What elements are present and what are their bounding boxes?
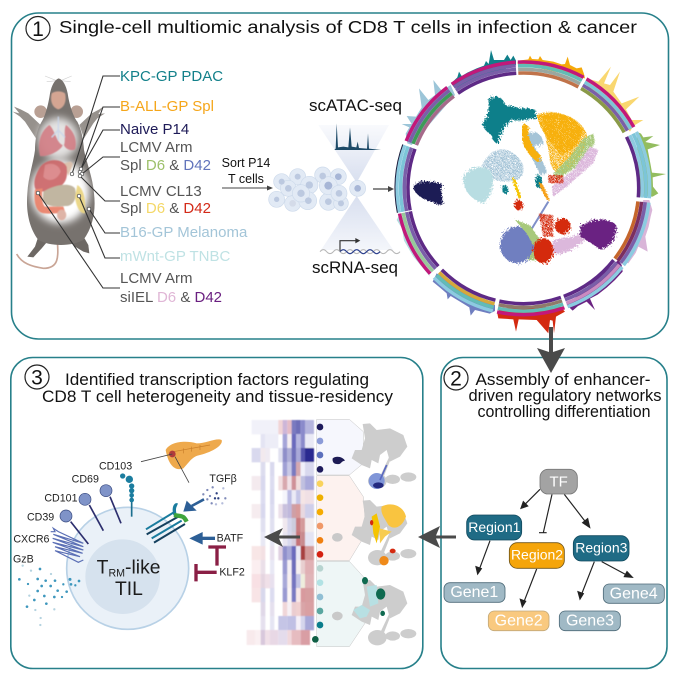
node: Region3 [573,536,629,561]
surface labels: CD101 [44,492,78,504]
sort label with arrow [222,156,273,190]
heading: controlling differentiation [478,403,650,421]
heading: Assembly of enhancer- [476,371,650,389]
node: Region3: Region3 [575,539,628,555]
sample labels: siIEL D6 & D42 [120,289,222,306]
pancreas icon [141,439,222,483]
circular UMAP plot [345,10,680,367]
inhibition bars: KLF2 [196,547,226,581]
node: Gene2 [488,611,549,631]
UMAP clusters [414,96,616,263]
surface labels: TGFβ [209,473,237,485]
step number 2 [444,366,468,390]
step number 2: 2 [450,368,462,390]
scRNA-seq label: scRNA-seq [312,258,398,277]
heading: Identified transcription factors regulating [65,371,369,389]
cell label: RM [108,568,125,580]
leader lines [36,76,120,288]
arrow: panel 1 to panel 2 [537,327,565,373]
sample labels: Naive P14 [120,121,189,138]
arrow: panel 2 to panel 3 [418,526,456,548]
scATAC-seq label: scATAC-seq [309,96,402,115]
step number 3 [25,365,49,390]
sort label with arrow: Sort P14 [222,156,270,170]
panel 3: identified transcription factors [11,358,423,668]
surface proteins [71,487,132,544]
surface labels: KLF2 [219,566,245,578]
node: Gene1 [444,583,505,602]
sample labels: LCMV Arm [120,139,193,156]
network arrows [476,489,632,607]
surface labels: CD39 [27,512,54,524]
node: TF: TF [550,474,568,491]
cluster dots [312,424,323,643]
CXCR6 receptor [51,528,83,562]
small UMAP: effector and exhausted [332,500,416,565]
cluster module panels [312,419,416,647]
cell label: -like [125,557,161,578]
icon: mouse anatomy [13,76,105,268]
surface labels: CD69 [72,473,99,485]
sample labels: Spl D6 & D42 [120,157,211,174]
surface labels: CD103 [99,460,132,472]
arrow: networks to heatmap side [264,528,300,547]
surface labels: CXCR6 [13,533,50,545]
heading [42,371,394,406]
regulatory network diagram [444,469,664,631]
cell label [97,557,161,600]
TGFb receptor [146,505,187,543]
sample labels: LCMV Arm [120,270,193,287]
sample labels: LCMV CL13 [120,183,202,200]
scATAC peaks [334,123,381,150]
sample labels: B-ALL-GP Spl [120,98,214,115]
arrow to UMAP [373,186,394,192]
surface labels [13,460,245,578]
node: TF [540,469,577,494]
node: Gene1: Gene1 [450,584,498,601]
T cell diagram [13,439,245,629]
node: Gene4: Gene4 [610,585,658,602]
sequencing funnel and cells [269,123,400,254]
panel 2: enhancer-driven regulatory networks [441,358,667,668]
sample labels: Spl D6 & D42 [120,200,211,217]
sort label with arrow: T cells [228,172,264,186]
node: Gene3 [559,611,620,631]
cell body [67,507,189,629]
step number 3: 3 [31,366,43,390]
coloured ring segments [345,10,680,367]
arrow: BATF [189,532,215,545]
sample labels: B16-GP Melanoma [120,224,248,241]
T cells cluster [269,167,366,211]
heatmap [247,420,314,645]
surface labels: GzB [13,554,34,566]
peak tracks around ring [397,50,666,333]
small UMAP: naive and memory [333,423,416,489]
cell label: T [97,557,108,578]
heading: CD8 T cell heterogeneity and tissue-residency [42,388,394,406]
node: Region2: Region2 [511,547,563,563]
scRNA transcript [320,238,400,254]
surface labels: BATF [217,533,244,545]
node: Region1 [467,515,522,540]
arrow: TGFb to receptor [183,499,204,512]
step number 1 [26,16,50,41]
panel 1: single-cell multiomic analysis [12,10,680,367]
heading: driven regulatory networks [468,387,662,405]
node: Gene3: Gene3 [566,612,614,629]
title: Single-cell multiomic analysis of CD8 T cells in infection & cancer [59,17,637,37]
sample labels: KPC-GP PDAC [120,68,223,85]
sample labels [120,68,248,306]
small UMAP: tumour infiltrating [332,577,416,645]
cell label: TIL [115,579,143,600]
node: Gene2: Gene2 [495,612,543,629]
step number 1: 1 [32,18,44,41]
heading [468,371,662,421]
node: Region2 [509,543,564,568]
TGFb dots [202,486,226,505]
node: Region1: Region1 [468,519,521,535]
node: Gene4 [603,584,664,603]
sample labels: mWnt-GP TNBC [120,248,230,265]
GzB dots [18,564,80,626]
